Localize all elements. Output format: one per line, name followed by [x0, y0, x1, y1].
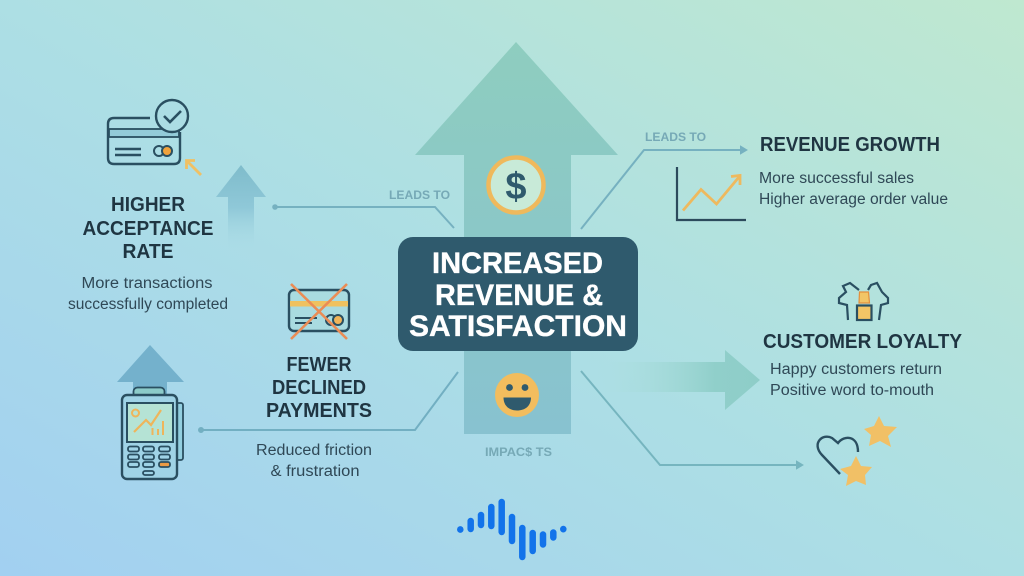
arrow: to hearts and stars	[581, 371, 802, 468]
heading: customer loyalty: CUSTOMER LOYALTY	[763, 331, 963, 353]
heading: higher acceptance rate: RATE	[122, 241, 174, 263]
text: declined description	[256, 442, 372, 480]
label: leads to right: LEADS TO	[645, 130, 706, 144]
text: declined description: Reduced friction	[256, 442, 372, 459]
panel: customer loyalty	[763, 283, 963, 399]
arrow: to fewer declined	[199, 372, 458, 432]
icon: heart and stars	[818, 416, 897, 486]
heading: fewer declined payments: DECLINED	[272, 377, 366, 399]
text: loyalty description	[770, 361, 942, 399]
text: acceptance description: successfully completed	[68, 296, 228, 313]
icon: dollar coin	[488, 158, 544, 212]
text: revenue description: More successful sales	[759, 170, 914, 187]
icon: smiley	[495, 373, 539, 417]
central up arrow	[415, 42, 618, 434]
text: acceptance description: More transactions	[82, 275, 213, 292]
impacts label: IMPAC$ TS	[485, 445, 552, 459]
icon: customer loyalty jacket	[839, 283, 888, 320]
heading: fewer declined payments: PAYMENTS	[266, 400, 372, 422]
panel: fewer declined payments	[256, 284, 372, 480]
text: declined description: & frustration	[270, 463, 360, 480]
text: revenue description: Higher average order value	[759, 191, 948, 208]
icon: payment terminal with arrow	[117, 345, 184, 479]
title panel: SATISFACTION	[409, 310, 627, 343]
heading: revenue growth: REVENUE GROWTH	[760, 134, 940, 156]
arrow: to higher acceptance	[273, 205, 454, 228]
heading: higher acceptance rate: ACCEPTANCE	[82, 218, 214, 240]
heading: fewer declined payments	[266, 354, 372, 422]
icon: blue sound wave logo	[460, 502, 563, 557]
arrow: to revenue growth	[581, 147, 746, 229]
heading: higher acceptance rate: HIGHER	[111, 194, 186, 216]
icon: growth chart	[677, 167, 746, 220]
text: loyalty description: Happy customers return	[770, 361, 942, 378]
title panel: REVENUE &	[435, 279, 603, 312]
heading: fewer declined payments: FEWER	[286, 354, 352, 376]
heading: higher acceptance rate	[82, 194, 214, 263]
text: loyalty description: Positive word to-mouth	[770, 382, 934, 399]
panel: revenue growth	[677, 134, 948, 220]
text: revenue description	[759, 170, 948, 208]
icon: crossed-out card	[289, 284, 349, 339]
icon: dollar coin: $	[505, 166, 527, 208]
title panel: INCREASED	[432, 247, 603, 280]
arrow: small faded up arrow	[216, 165, 266, 250]
icon: card with check	[108, 100, 201, 175]
panel: higher acceptance rate	[68, 100, 228, 313]
text: acceptance description	[68, 275, 228, 313]
title panel	[398, 237, 638, 351]
label: leads to left: LEADS TO	[389, 188, 450, 202]
arrow: large right arrow	[580, 350, 760, 410]
